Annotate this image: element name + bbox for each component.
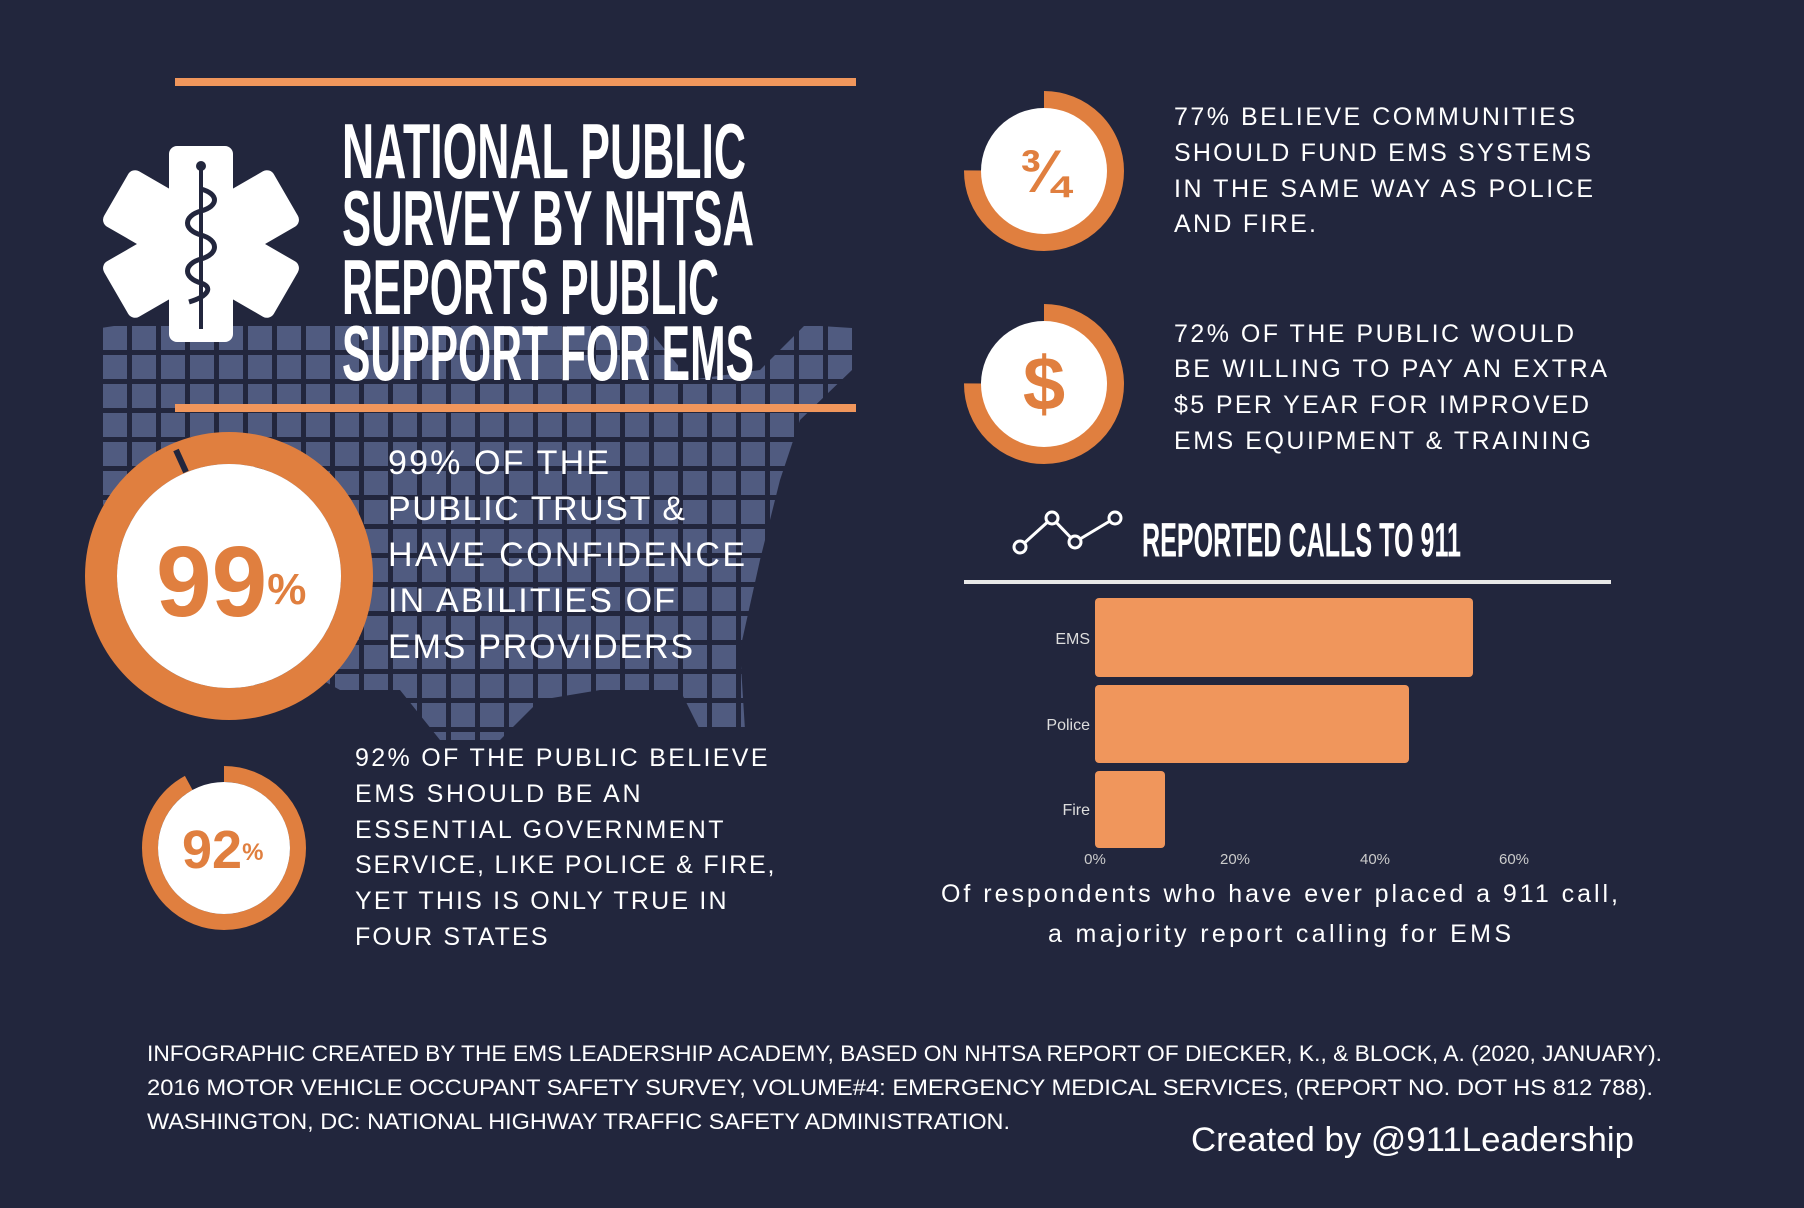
- text: 99% trust: [388, 444, 747, 666]
- icon: star of life: [100, 146, 302, 342]
- text: 92% essential: FOUR STATES: [355, 923, 549, 951]
- ring: 99%: 99: [156, 526, 267, 638]
- text: 92% essential: ESSENTIAL GOVERNMENT: [355, 816, 725, 844]
- chart caption: a majority report calling for EMS: [1048, 920, 1512, 948]
- title: REPORTS PUBLIC: [342, 243, 719, 331]
- text: 99% trust: IN ABILITIES OF: [388, 582, 677, 620]
- bar chart: EMS: [1055, 631, 1090, 648]
- ring: 92%: [150, 774, 298, 922]
- text: 99% trust: PUBLIC TRUST &: [388, 490, 687, 528]
- bar chart: Police: [1046, 717, 1090, 734]
- footer citation: [147, 1041, 1662, 1134]
- ring: 92%: 92: [182, 820, 242, 880]
- ring: 99%: %: [267, 565, 306, 614]
- footer citation: 2016 MOTOR VEHICLE OCCUPANT SAFETY SURVEY, VOLUME#4: EMERGENCY MEDICAL SERVICES, (REPORT NO. DOT HS 812 788).: [147, 1075, 1653, 1100]
- footer citation: WASHINGTON, DC: NATIONAL HIGHWAY TRAFFIC SAFETY ADMINISTRATION.: [147, 1109, 1010, 1134]
- text: 99% trust: HAVE CONFIDENCE: [388, 536, 747, 574]
- bar chart: Fire: [1062, 802, 1090, 819]
- credit: Created by @911Leadership: [1191, 1121, 1634, 1159]
- bar chart: 20%: [1220, 851, 1250, 868]
- text: 72% pay: $5 PER YEAR FOR IMPROVED: [1174, 391, 1591, 419]
- icon: dollar: $: [1023, 342, 1065, 427]
- text: 99% trust: 99% OF THE: [388, 444, 611, 482]
- text: 92% essential: 92% OF THE PUBLIC BELIEVE: [355, 744, 769, 772]
- text: 99% trust: EMS PROVIDERS: [388, 628, 695, 666]
- icon: three quarters: [973, 100, 1115, 242]
- text: 72% pay: BE WILLING TO PAY AN EXTRA: [1174, 355, 1609, 383]
- text: 92% essential: EMS SHOULD BE AN: [355, 780, 642, 808]
- title: SUPPORT FOR EMS: [342, 310, 754, 397]
- text: 77% fund: 77% BELIEVE COMMUNITIES: [1174, 103, 1577, 131]
- chart caption: Of respondents who have ever placed a 911 call,: [941, 880, 1619, 908]
- text: 92% essential: [355, 744, 776, 951]
- text: 77% fund: SHOULD FUND EMS SYSTEMS: [1174, 139, 1593, 167]
- icon: dollar: [973, 313, 1115, 455]
- ring: 99%: [101, 448, 357, 704]
- title: SURVEY BY NHTSA: [342, 174, 754, 262]
- icon: line chart: [1014, 512, 1121, 553]
- footer citation: INFOGRAPHIC CREATED BY THE EMS LEADERSHIP ACADEMY, BASED ON NHTSA REPORT OF DIECKER, K., & BLOCK, A. (2020, JANUARY).: [147, 1041, 1662, 1066]
- map background: [101, 324, 852, 740]
- chart caption: [941, 880, 1619, 948]
- ring: 92%: %: [242, 839, 263, 866]
- text: 72% pay: [1174, 320, 1609, 455]
- text: 92% essential: SERVICE, LIKE POLICE & FIRE,: [355, 851, 776, 879]
- title: NATIONAL PUBLIC: [342, 107, 746, 195]
- text: 72% pay: EMS EQUIPMENT & TRAINING: [1174, 427, 1593, 455]
- text: 92% essential: YET THIS IS ONLY TRUE IN: [355, 887, 728, 915]
- text: 77% fund: AND FIRE.: [1174, 210, 1318, 238]
- text: 77% fund: IN THE SAME WAY AS POLICE: [1174, 175, 1595, 203]
- top orange line: [175, 78, 856, 86]
- bar chart: 60%: [1499, 851, 1529, 868]
- icon: three quarters: ¾: [1019, 138, 1074, 205]
- chart title: REPORTED CALLS TO 911: [1142, 514, 1461, 568]
- title: [342, 107, 754, 397]
- text: 77% fund: [1174, 103, 1595, 238]
- text: 72% pay: 72% OF THE PUBLIC WOULD: [1174, 320, 1576, 348]
- bar chart: 40%: [1360, 851, 1390, 868]
- second orange line: [175, 404, 856, 412]
- bar chart: [1046, 598, 1529, 868]
- bar chart: 0%: [1084, 851, 1106, 868]
